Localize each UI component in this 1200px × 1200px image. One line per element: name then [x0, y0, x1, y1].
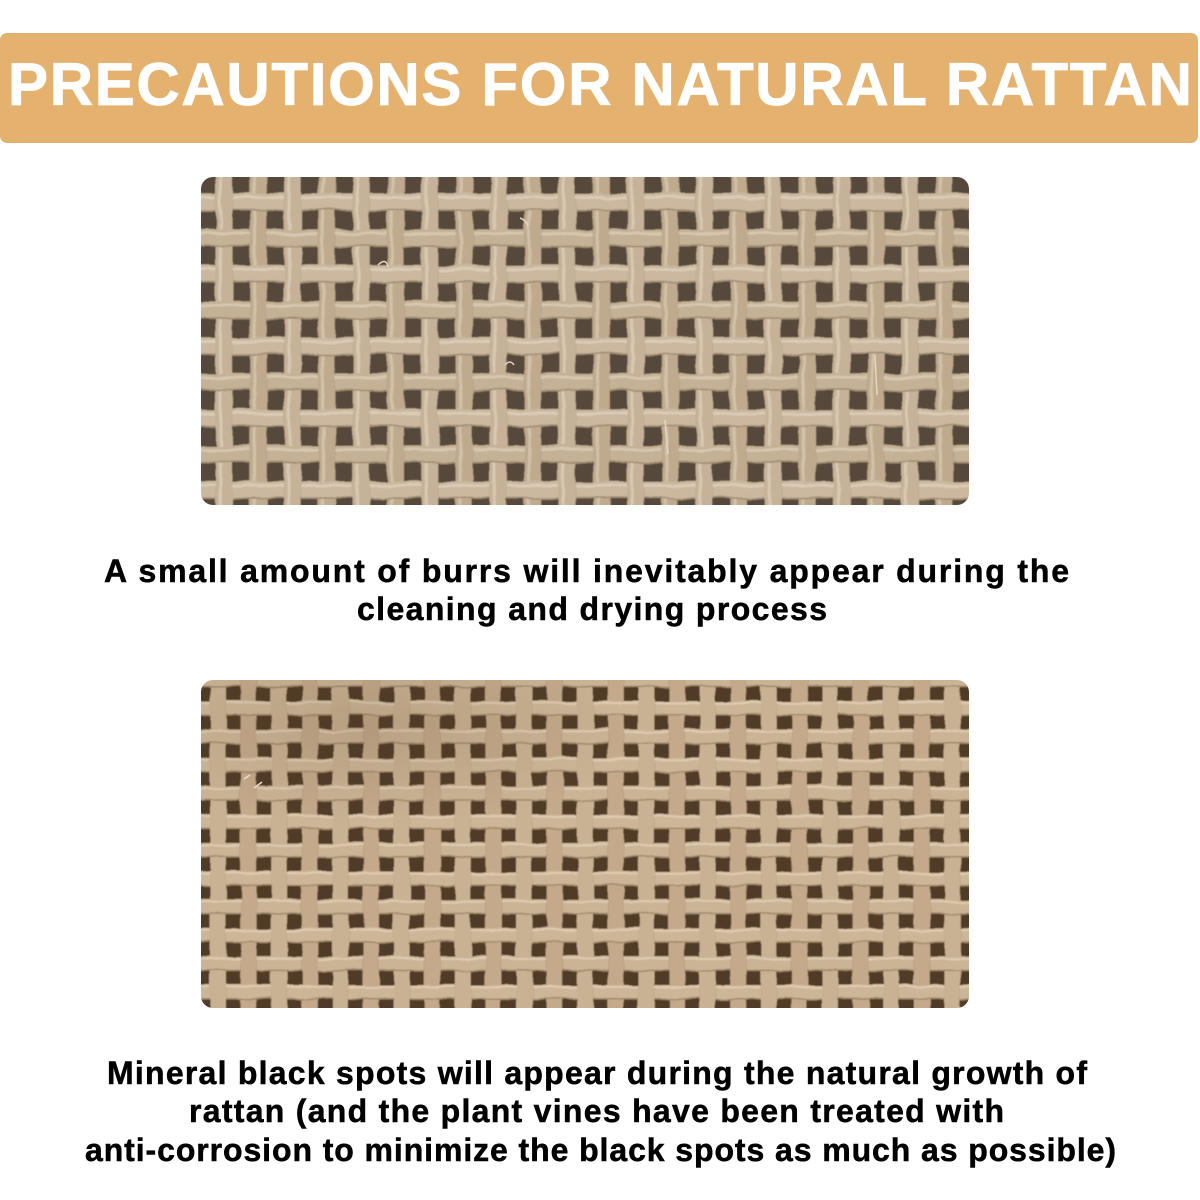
- title banner: [0, 33, 1198, 143]
- photo: rattan weave with mineral spots: [201, 680, 969, 1008]
- caption: burrs: [104, 553, 1069, 627]
- caption: mineral black spots: anti-corrosion to minimize the black spots as much as possible): [85, 1132, 1116, 1168]
- title: PRECAUTIONS FOR NATURAL RATTAN: [8, 51, 1192, 118]
- caption: mineral black spots: [85, 1055, 1116, 1168]
- photo: rattan weave with burrs: [190, 166, 980, 516]
- caption: burrs: cleaning and drying process: [357, 591, 827, 627]
- caption: mineral black spots: Mineral black spots will appear during the natural growth of: [107, 1055, 1087, 1091]
- caption: burrs: A small amount of burrs will inevitably appear during the: [104, 553, 1069, 589]
- caption: mineral black spots: rattan (and the plant vines have been treated with: [189, 1093, 1004, 1129]
